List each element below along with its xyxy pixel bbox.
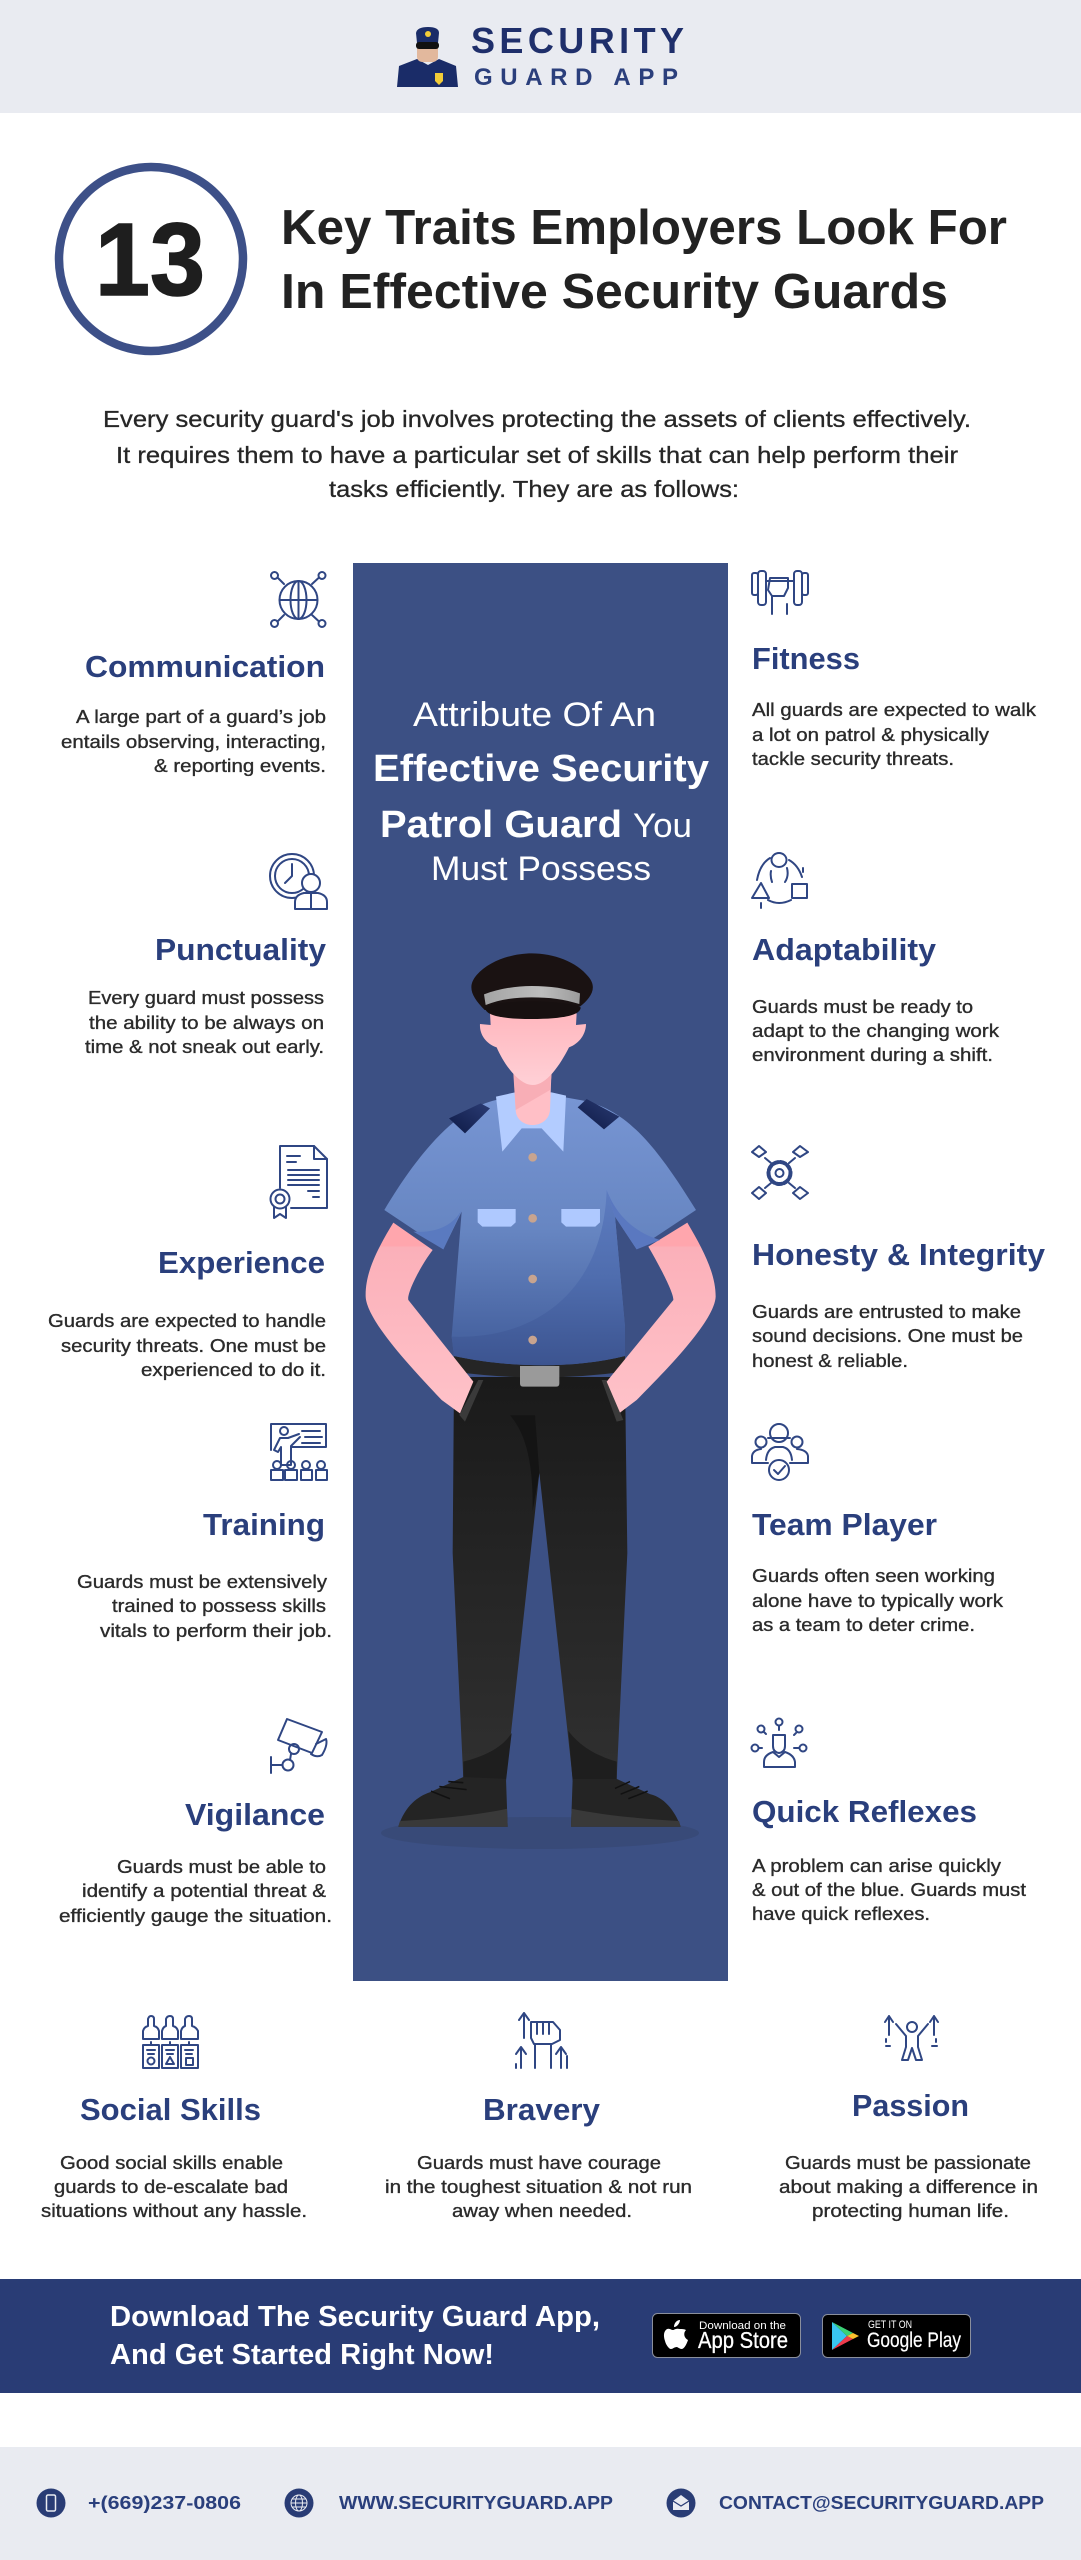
description: Guards must have courage (417, 2152, 661, 2173)
trait: Quick Reflexes: Quick Reflexes (752, 1794, 977, 1829)
panel: central guard column (353, 563, 728, 1981)
description: & out of the blue. Guards must (752, 1879, 1026, 1900)
description: honest & reliable. (752, 1350, 908, 1371)
trait: Bravery (385, 2013, 692, 2221)
neck (513, 1067, 552, 1125)
contact: phone: +(669)237-0806 (88, 2492, 241, 2513)
icon: globe network (271, 572, 326, 627)
description: security threats. One must be (61, 1335, 326, 1356)
contact: website (284, 2488, 613, 2518)
number badge: 13 (59, 167, 243, 351)
description: a lot on patrol & physically (752, 724, 990, 745)
trait: Team Player: Team Player (752, 1507, 937, 1542)
center heading: Attribute Of An (413, 696, 656, 734)
logo: SECURITY (471, 20, 684, 61)
description: sound decisions. One must be (752, 1325, 1023, 1346)
icon: adapting shapes (752, 853, 807, 908)
trait: Social Skills: Social Skills (80, 2092, 261, 2127)
legs and shoes (398, 1377, 681, 1827)
description (752, 1301, 1023, 1371)
icon: guard logo (397, 27, 458, 87)
description: vitals to perform their job. (100, 1620, 332, 1641)
description: Good social skills enable (60, 2152, 283, 2173)
shirt (384, 1092, 696, 1365)
description: the ability to be always on (89, 1012, 324, 1033)
epaulettes (449, 1103, 490, 1133)
trait: Punctuality (85, 854, 327, 1057)
trait: Vigilance: Vigilance (185, 1797, 325, 1832)
trait: Passion (779, 2016, 1038, 2221)
description: A problem can arise quickly (752, 1855, 1002, 1876)
description (752, 699, 1037, 769)
download banner (0, 2279, 1081, 2393)
trait: Fitness (752, 571, 1037, 769)
description: identify a potential threat & (82, 1880, 327, 1901)
title (281, 201, 1007, 319)
description: Guards are expected to handle (48, 1310, 326, 1331)
trait: Training: Training (203, 1507, 325, 1542)
description: Guards must be able to (117, 1856, 326, 1877)
trait: Experience: Experience (158, 1245, 325, 1280)
trait: Honesty & Integrity: Honesty & Integrity (752, 1237, 1046, 1272)
description: in the toughest situation & not run (385, 2176, 692, 2197)
trait: Passion: Passion (852, 2088, 969, 2123)
description (61, 706, 326, 776)
description: Guards must be passionate (785, 2152, 1031, 2173)
trait: Training (77, 1424, 332, 1641)
banner text: Download The Security Guard App, (110, 2301, 600, 2333)
intro text: Every security guard's job involves protecting the assets of clients effectively. (103, 406, 971, 432)
intro text: It requires them to have a particular set of skills that can help perform their (116, 442, 958, 468)
trait: Experience (48, 1146, 327, 1380)
description: alone have to typically work (752, 1590, 1004, 1611)
center heading (373, 696, 709, 888)
icon: person with pins (752, 1718, 806, 1767)
upper body (366, 953, 716, 1422)
description (48, 1310, 326, 1380)
icon: certificate (270, 1146, 327, 1218)
trait: Fitness: Fitness (752, 641, 860, 676)
description: experienced to do it. (141, 1359, 326, 1380)
icon: cheering figure (885, 2016, 938, 2060)
icon: fist and arrows (516, 2013, 567, 2068)
icon: team with check (752, 1424, 808, 1480)
contact: email: CONTACT@SECURITYGUARD.APP (719, 2492, 1044, 2513)
description: Guards are entrusted to make (752, 1301, 1021, 1322)
number badge: 13: 13 (95, 202, 205, 317)
google play badge: Google Play (867, 2329, 961, 2352)
contact: phone (36, 2488, 241, 2518)
banner text: And Get Started Right Now! (110, 2339, 494, 2371)
ground shadow (381, 1817, 699, 1849)
face (480, 1013, 586, 1085)
center heading: You (633, 807, 692, 845)
description: as a team to deter crime. (752, 1614, 975, 1635)
hat (471, 953, 593, 1010)
arms (366, 1223, 473, 1413)
trait: Bravery: Bravery (483, 2092, 601, 2127)
description: tackle security threats. (752, 748, 954, 769)
trait: Quick Reflexes (752, 1718, 1026, 1924)
header band (0, 0, 1081, 113)
description (752, 1565, 1004, 1635)
description: A large part of a guard’s job (76, 706, 326, 727)
description: away when needed. (452, 2200, 632, 2221)
logo: GUARD APP (474, 64, 678, 91)
description: protecting human life. (812, 2200, 1009, 2221)
description: efficiently gauge the situation. (59, 1905, 332, 1926)
trait: Vigilance (59, 1719, 332, 1926)
guard figure (366, 953, 716, 1849)
pocket trims (459, 1380, 623, 1422)
description: Guards must be ready to (752, 996, 973, 1017)
description (41, 2152, 307, 2221)
trait: Communication (61, 572, 326, 776)
icon: security camera (271, 1719, 326, 1773)
app store badge (652, 2314, 800, 2358)
description: adapt to the changing work (752, 1020, 1000, 1041)
description (85, 987, 324, 1057)
banner text (110, 2301, 600, 2371)
google play badge (822, 2314, 970, 2358)
center heading: Effective Security (373, 748, 709, 790)
logo (397, 20, 684, 91)
buttons (528, 1153, 537, 1344)
collar (496, 1092, 566, 1152)
description: environment during a shift. (752, 1044, 993, 1065)
trait: Team Player (752, 1424, 1004, 1635)
google play badge: GET IT ON (868, 2319, 912, 2331)
description: Guards often seen working (752, 1565, 995, 1586)
description (77, 1571, 332, 1641)
description (59, 1856, 332, 1926)
trait: Honesty & Integrity (752, 1146, 1046, 1371)
description: All guards are expected to walk (752, 699, 1037, 720)
description (779, 2152, 1038, 2221)
center heading: Patrol Guard (380, 804, 622, 846)
intro text (103, 406, 971, 502)
description: Guards must be extensively (77, 1571, 328, 1592)
intro text: tasks efficiently. They are as follows: (329, 476, 739, 502)
trait: Communication: Communication (85, 649, 325, 684)
belt (454, 1352, 625, 1377)
icon: trainer with class (271, 1424, 327, 1480)
icon: gears (752, 1146, 808, 1199)
description: trained to possess skills (112, 1595, 326, 1616)
icon: dumbbell fist (752, 571, 808, 614)
app store badge: App Store (698, 2327, 788, 2353)
icon: people and clipboards (143, 2016, 198, 2068)
trait: Punctuality: Punctuality (155, 932, 327, 967)
description: entails observing, interacting, (61, 731, 326, 752)
contact: email (666, 2488, 1044, 2518)
description: guards to de-escalate bad (54, 2176, 288, 2197)
center heading: Must Possess (431, 850, 651, 888)
description: Every guard must possess (88, 987, 324, 1008)
description (752, 1855, 1026, 1924)
buckle (520, 1366, 559, 1387)
app store badge: Download on the (699, 2320, 786, 2332)
trait: Social Skills (41, 2016, 307, 2221)
description: & reporting events. (154, 755, 326, 776)
trait: Adaptability (752, 853, 1000, 1065)
title: In Effective Security Guards (281, 265, 948, 319)
description (752, 996, 1000, 1065)
pockets (478, 1209, 516, 1227)
description (385, 2152, 692, 2221)
description: have quick reflexes. (752, 1903, 930, 1924)
description: time & not sneak out early. (85, 1036, 324, 1057)
description: about making a difference in (779, 2176, 1038, 2197)
icon: clock and person (270, 854, 327, 909)
description: situations without any hassle. (41, 2200, 307, 2221)
contact: website: WWW.SECURITYGUARD.APP (339, 2492, 613, 2513)
trait: Adaptability: Adaptability (752, 932, 937, 967)
footer band (0, 2447, 1081, 2560)
title: Key Traits Employers Look For (281, 201, 1007, 255)
